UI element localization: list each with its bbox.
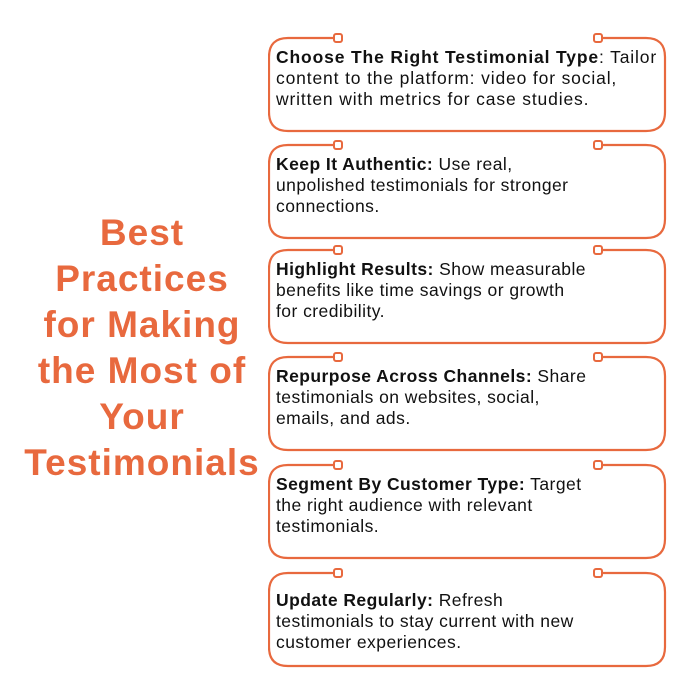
- title: [24, 212, 260, 483]
- card: authentic: Keep It Authentic: Use real,: [276, 154, 513, 174]
- card: choose type: content to the platform: video for social,: [276, 68, 617, 88]
- card: authentic: unpolished testimonials for stronger: [276, 175, 568, 195]
- card: results: for credibility.: [276, 301, 385, 321]
- title: Testimonials: [24, 442, 260, 483]
- card: update: Update Regularly: Refresh: [276, 590, 503, 610]
- card: segment: Segment By Customer Type: Target: [276, 474, 582, 494]
- card: authentic: [268, 140, 666, 240]
- card: authentic: connections.: [276, 196, 380, 216]
- card: repurpose: [268, 352, 666, 452]
- card: choose type: written with metrics for case studies.: [276, 89, 589, 109]
- title: the Most of: [38, 350, 246, 391]
- card: segment: the right audience with relevant: [276, 495, 533, 515]
- card: choose type: Choose The Right Testimonial Type: Tailor: [276, 47, 657, 67]
- card: segment: [268, 460, 666, 560]
- card: results: Highlight Results: Show measurable: [276, 259, 586, 279]
- card: results: [268, 245, 666, 344]
- title: Your: [99, 396, 185, 437]
- card: segment: testimonials.: [276, 516, 379, 536]
- card: repurpose: testimonials on websites, social,: [276, 387, 540, 407]
- card: repurpose: Repurpose Across Channels: Share: [276, 366, 586, 386]
- card: results: benefits like time savings or growth: [276, 280, 565, 300]
- title: Best: [100, 212, 184, 253]
- title: Practices: [55, 258, 229, 299]
- card: choose type: [268, 33, 666, 132]
- card: update: testimonials to stay current with new: [276, 611, 574, 631]
- card: update: [268, 568, 666, 668]
- card: repurpose: emails, and ads.: [276, 408, 411, 428]
- card: update: customer experiences.: [276, 632, 462, 652]
- title: for Making: [43, 304, 241, 345]
